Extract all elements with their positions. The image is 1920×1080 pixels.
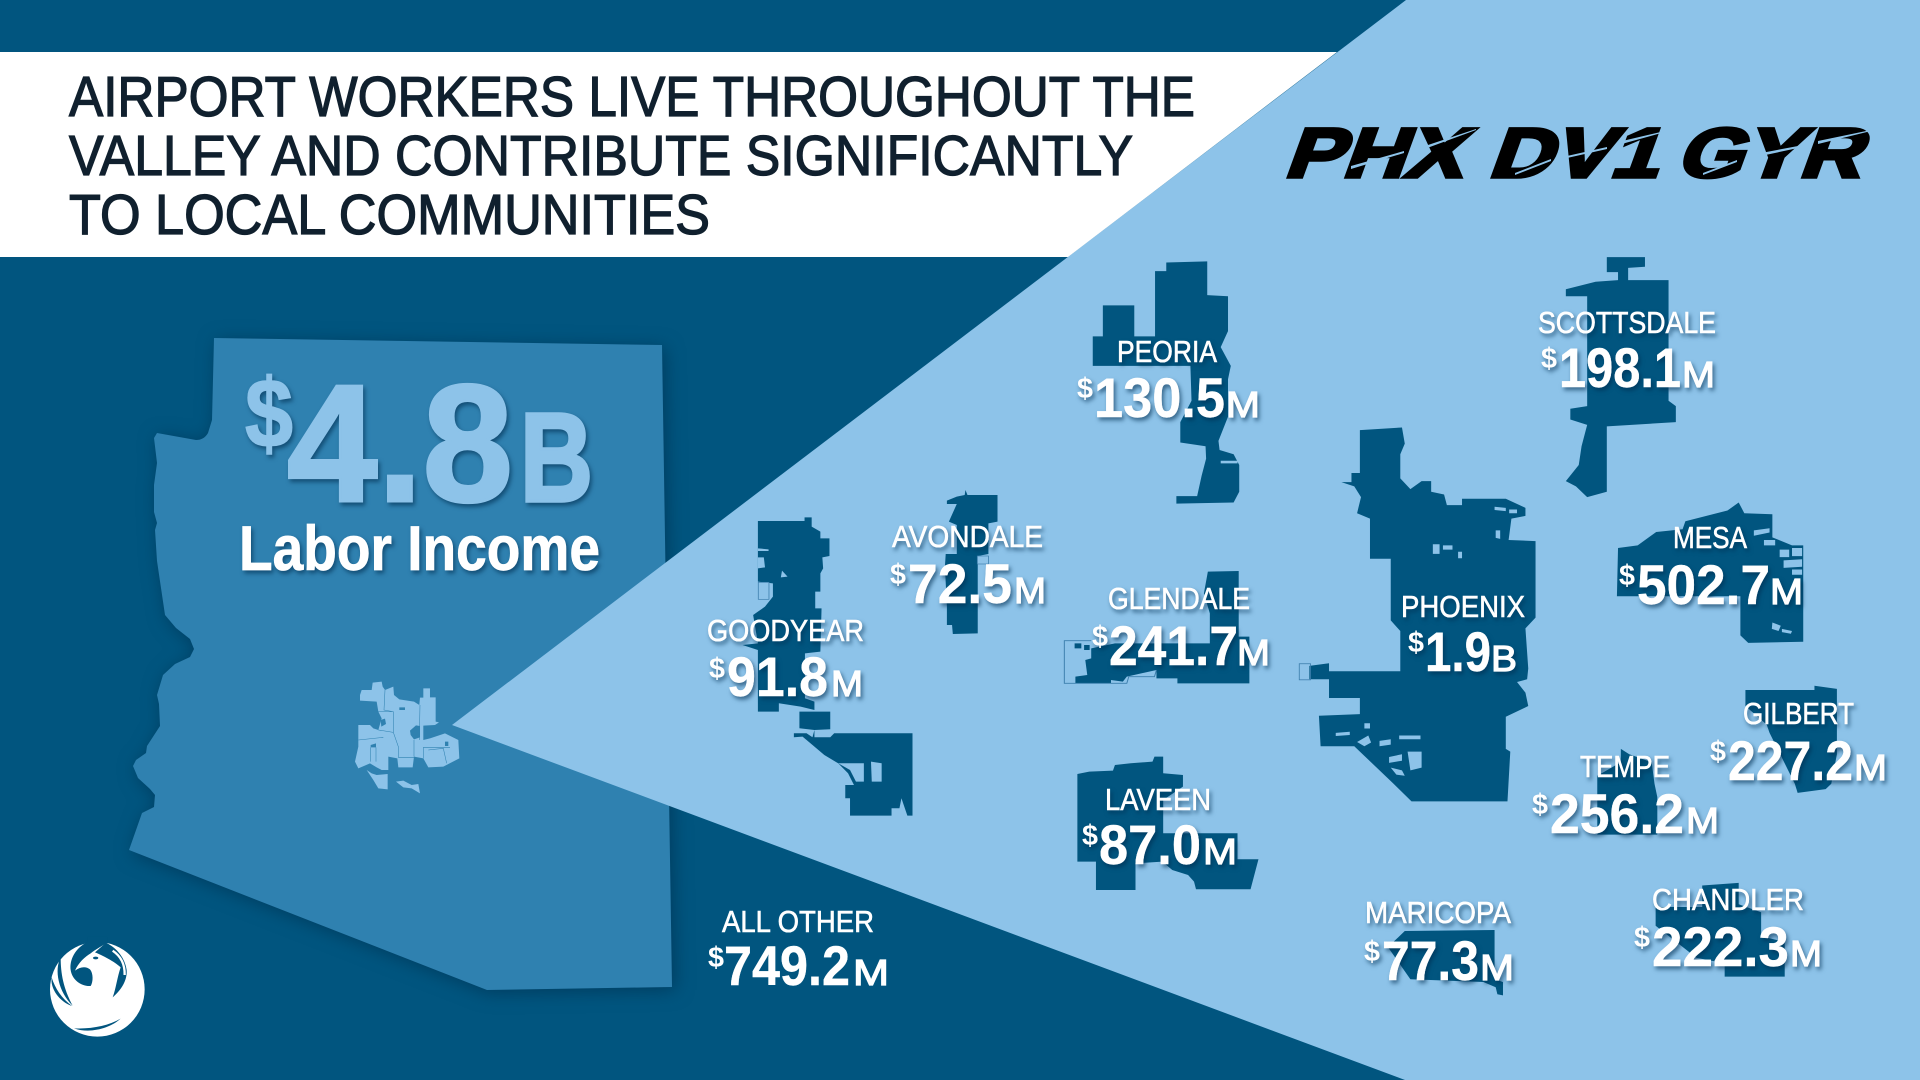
label: Tempe: TEMPE [1580,749,1670,784]
label: Avondale [890,519,1046,615]
label: Phoenix [1401,589,1525,683]
label: Peoria: 130.5 [1094,366,1225,429]
label: Avondale: $ [890,559,906,591]
map: Mesa [1617,502,1803,643]
label: Chandler: $ [1634,922,1650,954]
label: Peoria: $ [1077,373,1093,405]
label: Avondale: M [1014,570,1046,611]
label: Mesa: $ [1619,560,1635,592]
label: Peoria [1077,334,1260,429]
label: Laveen: M [1203,831,1237,872]
map: Phoenix [1299,427,1536,801]
label: Phoenix: 1.9 [1425,620,1491,683]
label: Avondale: 72.5 [908,552,1012,615]
label: Chandler: M [1790,933,1822,974]
label: Glendale: M [1237,632,1270,673]
title: TO LOCAL COMMUNITIES [69,183,710,247]
label: All Other [708,904,889,997]
callout wedge from Phoenix metro to city map [452,0,1920,1080]
label: Maricopa: MARICOPA [1365,895,1511,930]
icon: Phoenix bird logo [50,937,145,1037]
airport codes logo: DV1 [1481,115,1680,192]
label: Glendale [1092,581,1270,677]
label: Scottsdale: 198.1 [1559,336,1681,399]
map: Scottsdale [1566,257,1676,497]
label: Chandler: CHANDLER [1652,882,1804,917]
big number: total labor income: B [520,387,593,528]
label: Phoenix: B [1491,638,1517,679]
label: Maricopa [1364,895,1514,992]
airport codes logo [1277,115,1882,192]
title [69,65,1195,247]
label: Peoria: PEORIA [1117,334,1217,369]
label: All Other: M [853,952,889,993]
label: Mesa [1619,520,1803,616]
label: Laveen: 87.0 [1099,813,1201,876]
label: Phoenix: PHOENIX [1401,589,1525,624]
label: Gilbert: $ [1710,736,1726,768]
big number: total labor income: 4.8 [287,351,513,537]
label: Gilbert [1710,696,1887,792]
label: Maricopa: $ [1364,936,1380,968]
city value labels [707,305,1887,992]
label: All Other: $ [708,942,724,974]
label: All Other: ALL OTHER [722,904,874,939]
title: AIRPORT WORKERS LIVE THROUGHOUT THE [69,65,1195,129]
map: Phoenix metro inset [355,682,459,793]
label: All Other: 749.2 [724,934,850,997]
title: VALLEY AND CONTRIBUTE SIGNIFICANTLY [69,124,1133,188]
airport codes logo: GYR [1669,115,1882,192]
map: Avondale [945,490,998,634]
label: Chandler: 222.3 [1652,915,1789,978]
label: Maricopa: M [1480,947,1514,988]
map: Peoria [1093,261,1239,504]
map: Glendale [1064,571,1249,683]
label: Scottsdale: $ [1541,343,1557,375]
label: Scottsdale [1538,305,1716,399]
label: Tempe: 256.2 [1550,782,1684,845]
label: Gilbert: 227.2 [1728,729,1853,792]
label: Peoria: M [1226,384,1260,425]
big number: total labor income: Labor Income [239,514,600,584]
label: Scottsdale: SCOTTSDALE [1538,305,1716,340]
map: Chandler [1656,883,1785,977]
label: Laveen: $ [1082,820,1098,852]
big number: total labor income: $ [245,359,293,468]
map: Goodyear [742,517,912,816]
label: Glendale: 241.7 [1109,614,1238,677]
title banner [0,52,1337,257]
map: Tempe [1597,749,1657,835]
label: Glendale: $ [1092,621,1108,653]
label: Maricopa: 77.3 [1382,929,1479,992]
label: Goodyear: $ [709,653,725,685]
label: Laveen [1082,782,1237,876]
label: Avondale: AVONDALE [892,519,1043,554]
label: Phoenix: $ [1408,627,1424,659]
label: Tempe [1532,749,1719,845]
label: Scottsdale: M [1682,354,1715,395]
map: Arizona state silhouette [129,338,672,990]
label: Goodyear: 91.8 [727,645,828,708]
label: Goodyear: M [831,663,863,704]
label: Chandler [1634,882,1822,978]
map: Maricopa [1388,930,1503,995]
label: Goodyear [707,613,864,708]
label: Gilbert: GILBERT [1743,696,1854,731]
label: Goodyear: GOODYEAR [707,613,864,648]
label: Tempe: M [1686,800,1719,841]
map: Gilbert [1745,686,1837,793]
label: Mesa: M [1770,571,1803,612]
big number: total labor income [239,351,600,584]
map: Laveen [1077,757,1258,890]
label: Tempe: $ [1532,789,1548,821]
label: Gilbert: M [1854,747,1887,788]
label: Glendale: GLENDALE [1108,581,1250,616]
label: Mesa: 502.7 [1637,553,1770,616]
label: Mesa: MESA [1673,520,1747,555]
airport codes logo: PHX [1277,115,1484,192]
label: Laveen: LAVEEN [1105,782,1211,817]
